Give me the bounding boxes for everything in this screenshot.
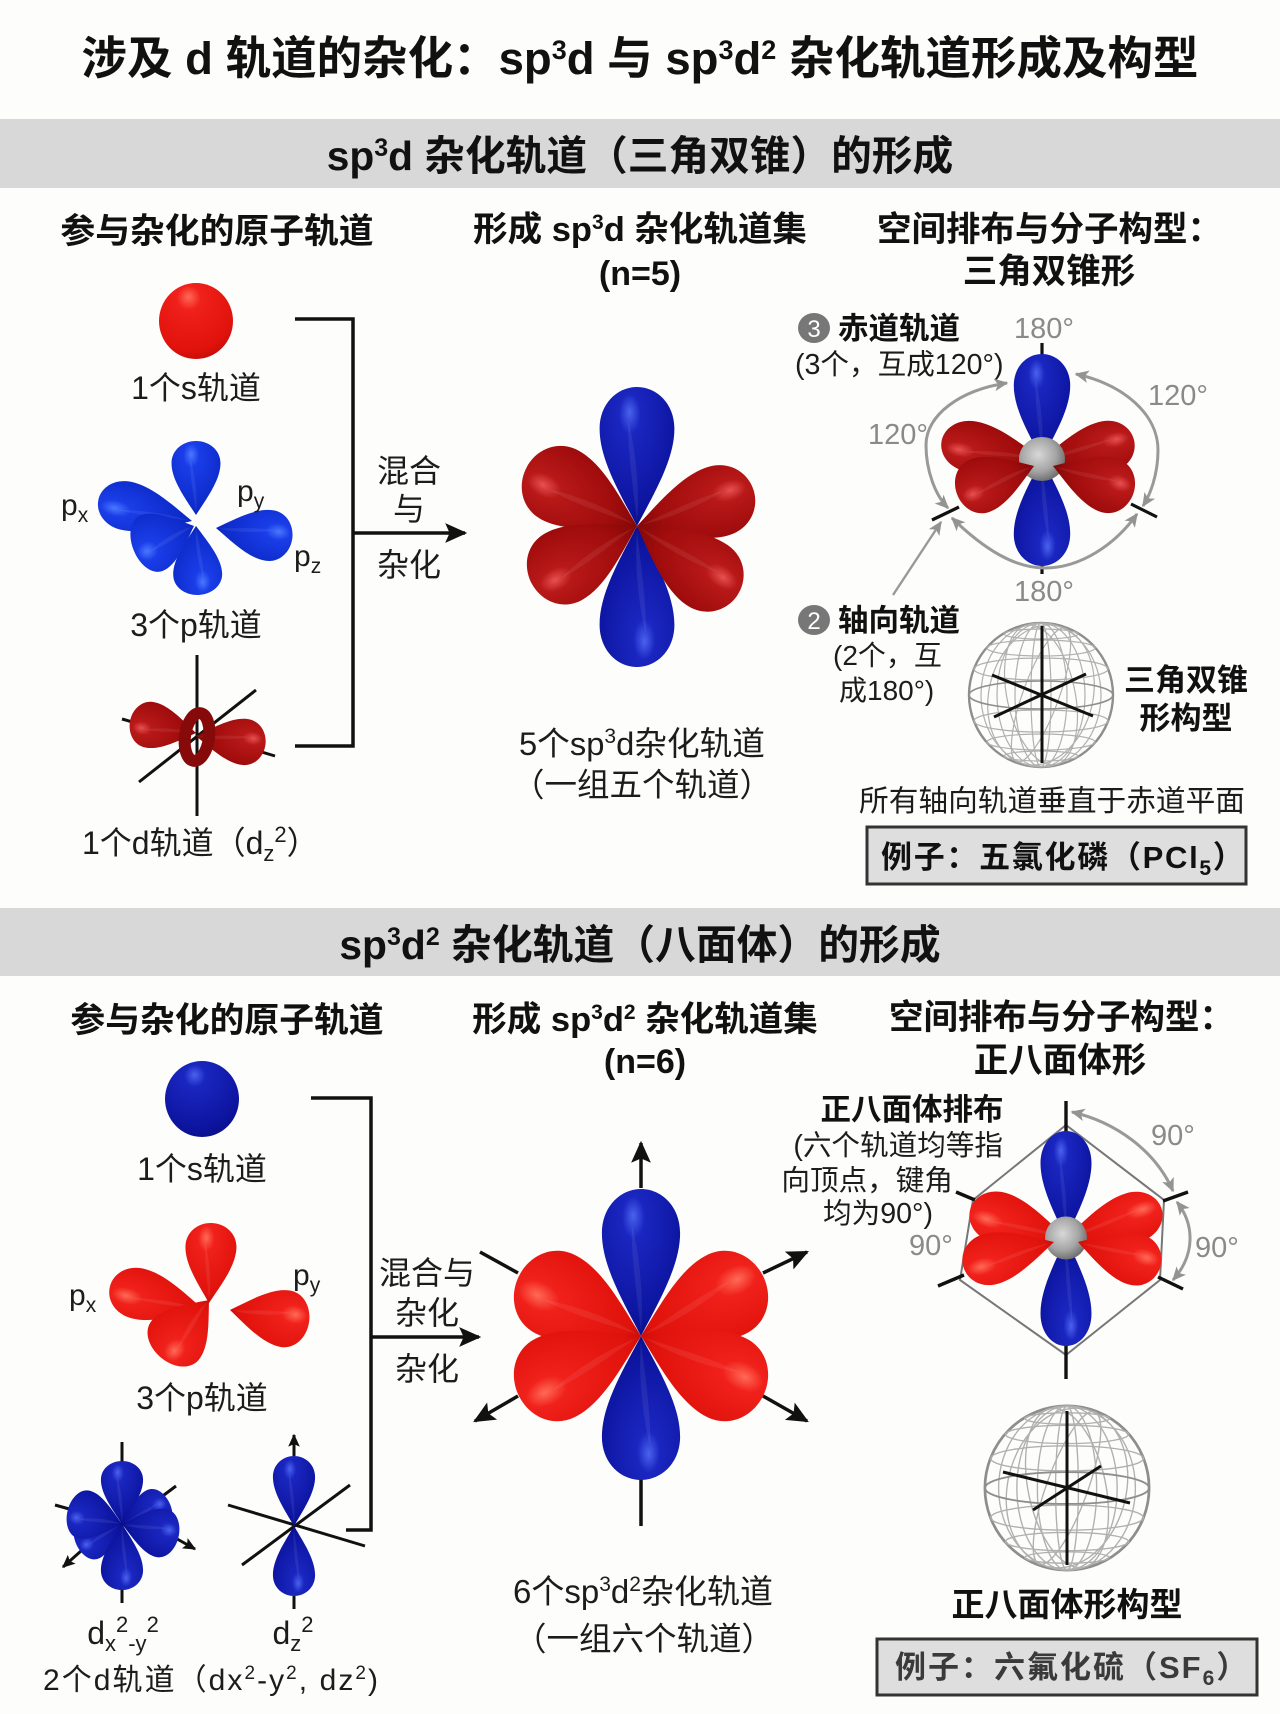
angle: 90° bbox=[1151, 1120, 1195, 1152]
icon: octahedral orbitals bbox=[938, 1101, 1188, 1379]
example box: 例子：六氟化硫（SF bbox=[895, 1650, 1203, 1685]
arrow: mix bracket bbox=[311, 1098, 479, 1530]
icon: dz2 orbital bbox=[228, 1435, 365, 1609]
heading: 形成 sp bbox=[472, 1001, 591, 1039]
label: mix: 混合 bbox=[377, 453, 441, 489]
label: geometry: 正八面体形构型 bbox=[952, 1586, 1182, 1623]
heading: d 杂化轨道集 bbox=[604, 211, 807, 249]
banner heading: 3 bbox=[387, 923, 401, 951]
label: hybridize: 杂化 bbox=[395, 1351, 459, 1387]
angle: 180° bbox=[1014, 576, 1074, 608]
badge 3: 3 bbox=[807, 316, 821, 343]
label: d orbital: z bbox=[263, 841, 274, 866]
panel: sp3d2 hybrid set bbox=[472, 1001, 818, 1657]
banner heading: 杂化轨道（八面体）的形成 bbox=[440, 922, 941, 968]
panel: sp3d hybrid set bbox=[473, 211, 807, 803]
angle: 90° bbox=[909, 1230, 953, 1262]
label: dx2-y2: d bbox=[87, 1615, 105, 1651]
label: axial detail 1: (2个，互 bbox=[833, 640, 942, 671]
arcs bbox=[926, 374, 1158, 568]
label: px: x bbox=[78, 504, 89, 527]
label: d orbital: 1个d轨道（d bbox=[82, 825, 263, 861]
banner heading: sp bbox=[339, 922, 387, 968]
label: py: p bbox=[237, 475, 254, 508]
panel: sp3d2 geometry bbox=[781, 999, 1257, 1695]
heading: 参与杂化的原子轨道 bbox=[70, 1001, 384, 1040]
angle: 90° bbox=[1195, 1232, 1239, 1264]
detail line 3: 均为90°) bbox=[823, 1198, 933, 1230]
banner heading: d 杂化轨道（三角双锥）的形成 bbox=[388, 133, 953, 179]
icon: trigonal bipyramidal orbitals bbox=[932, 343, 1157, 574]
caption sub: （一组六个轨道） bbox=[514, 1621, 774, 1657]
caption: d bbox=[611, 1573, 629, 1610]
label: axial detail 2: 成180°) bbox=[839, 675, 934, 706]
heading: 杂化轨道集 bbox=[636, 1001, 818, 1039]
icon: six lobes bbox=[475, 1143, 807, 1526]
label: geometry 2: 形构型 bbox=[1140, 701, 1232, 736]
icon: p orbitals bbox=[104, 1222, 313, 1377]
label: mix: 混合与 bbox=[379, 1255, 475, 1291]
label: s orbital: 1个s轨道 bbox=[137, 1151, 267, 1187]
label: dx2-y2: -y bbox=[128, 1631, 147, 1656]
heading: 3 bbox=[592, 211, 604, 234]
label: arrangement: 正八面体排布 bbox=[820, 1093, 1004, 1127]
title: 2 bbox=[761, 35, 776, 65]
banner heading: 3 bbox=[374, 134, 388, 162]
example box: ） bbox=[1213, 840, 1245, 875]
section banner: sp3d bbox=[0, 119, 1280, 188]
outline hexagon bbox=[960, 1125, 1164, 1355]
heading: 空间排布与分子构型： bbox=[889, 999, 1234, 1037]
label: geometry: 三角双锥 bbox=[1124, 663, 1248, 698]
icon: s orbital bbox=[165, 1061, 239, 1137]
label: d orbitals: 2 bbox=[355, 1663, 366, 1684]
angle: 120° bbox=[1148, 380, 1208, 412]
title: d bbox=[733, 33, 761, 84]
caption: 6个sp bbox=[513, 1573, 599, 1610]
heading count: (n=5) bbox=[599, 255, 681, 293]
caption: 3 bbox=[599, 1573, 611, 1596]
icon: wire sphere bbox=[985, 1395, 1149, 1581]
example box bbox=[877, 1639, 1257, 1695]
example box: 6 bbox=[1203, 1667, 1216, 1690]
label: s orbital: 1个s轨道 bbox=[131, 370, 261, 406]
label: d orbitals: ) bbox=[368, 1664, 378, 1697]
title: 涉及 d 轨道的杂化：sp bbox=[82, 33, 552, 84]
title: 杂化轨道形成及构型 bbox=[776, 33, 1198, 84]
icon: p orbitals bbox=[93, 441, 296, 596]
label: equatorial: 赤道轨道 bbox=[838, 312, 960, 346]
angle: 180° bbox=[1014, 313, 1074, 345]
heading: 3 bbox=[591, 1001, 603, 1024]
caption: 杂化轨道 bbox=[641, 1573, 773, 1610]
heading: d bbox=[603, 1001, 624, 1039]
example box: ） bbox=[1216, 1650, 1249, 1685]
label: dx2-y2: 2 bbox=[116, 1612, 128, 1637]
icon: wire sphere bbox=[969, 614, 1113, 776]
badge 2: 2 bbox=[807, 608, 821, 635]
heading sub: 正八面体形 bbox=[974, 1042, 1146, 1080]
label: d orbitals: 2 bbox=[244, 1663, 255, 1684]
heading: 形成 sp bbox=[473, 211, 592, 249]
caption: d杂化轨道 bbox=[616, 725, 765, 762]
section banner: sp3d2 bbox=[0, 908, 1280, 976]
badge 2 bbox=[798, 605, 830, 635]
title: d 与 sp bbox=[567, 33, 718, 84]
label: d orbitals: 2个d轨道（dx bbox=[43, 1664, 242, 1697]
label: pz: p bbox=[294, 540, 311, 573]
example box: 5 bbox=[1199, 857, 1213, 880]
title: 3 bbox=[552, 35, 567, 65]
heading: 空间排布与分子构型： bbox=[877, 211, 1222, 249]
icon: dx2-y2 orbital bbox=[55, 1442, 195, 1603]
detail line 1: (六个轨道均等指 bbox=[793, 1130, 1003, 1162]
arcs bbox=[1072, 1112, 1190, 1280]
label: px: p bbox=[69, 1279, 86, 1312]
label: py: y bbox=[254, 490, 265, 513]
caption: 5个sp bbox=[519, 725, 604, 762]
label: and: 与 bbox=[393, 491, 425, 527]
icon: s orbital bbox=[159, 283, 233, 359]
icon: d orbital bbox=[122, 655, 275, 816]
caption sub: （一组五个轨道） bbox=[512, 767, 772, 803]
heading count: (n=6) bbox=[604, 1043, 686, 1081]
label: dz2: d bbox=[272, 1615, 290, 1651]
label: d orbital: 2 bbox=[274, 822, 287, 847]
label: d orbitals: 2 bbox=[286, 1663, 297, 1684]
banner heading: 2 bbox=[426, 923, 440, 951]
label: equatorial detail: (3个，互成120°) bbox=[795, 349, 1003, 381]
note: 所有轴向轨道垂直于赤道平面 bbox=[859, 785, 1245, 818]
label: dz2: z bbox=[290, 1631, 301, 1656]
detail line 2: 向顶点，键角 bbox=[781, 1165, 953, 1197]
panel: sp3d geometry bbox=[795, 211, 1248, 884]
label: py: p bbox=[293, 1259, 310, 1292]
example box: 例子：五氯化磷（PCl bbox=[881, 840, 1199, 875]
label: d orbital: ） bbox=[287, 825, 319, 861]
title: 3 bbox=[718, 35, 733, 65]
angle: 120° bbox=[868, 419, 928, 451]
heading: 2 bbox=[624, 1001, 636, 1024]
heading: 参与杂化的原子轨道 bbox=[60, 212, 374, 251]
panel: sp3d atomic orbitals bbox=[60, 212, 374, 866]
panel: sp3d2 atomic orbitals bbox=[43, 1001, 384, 1697]
label: dx2-y2: x bbox=[105, 1631, 116, 1656]
label: px: p bbox=[61, 489, 78, 522]
label: dz2: 2 bbox=[301, 1612, 314, 1637]
caption: 2 bbox=[629, 1573, 641, 1596]
label: p orbitals: 3个p轨道 bbox=[136, 1380, 268, 1416]
icon: five lobes bbox=[508, 387, 764, 667]
label: hybridize: 杂化 bbox=[395, 1295, 459, 1331]
banner heading: sp bbox=[327, 133, 374, 179]
arrow: mix bracket bbox=[295, 319, 465, 746]
label: dx2-y2: 2 bbox=[147, 1612, 159, 1637]
badge 3 bbox=[798, 313, 830, 343]
example box bbox=[867, 827, 1246, 884]
label: d orbitals: -y bbox=[257, 1664, 284, 1697]
caption: 3 bbox=[604, 725, 616, 748]
label: pz: z bbox=[311, 555, 321, 578]
label: py: y bbox=[310, 1274, 321, 1297]
label: px: x bbox=[86, 1294, 97, 1317]
heading sub: 三角双锥形 bbox=[963, 253, 1135, 291]
label: axial: 轴向轨道 bbox=[838, 604, 960, 638]
arrow: axial pointer bbox=[893, 522, 941, 595]
label: hybridize: 杂化 bbox=[377, 547, 441, 583]
label: d orbitals: , dz bbox=[299, 1664, 353, 1697]
label: p orbitals: 3个p轨道 bbox=[130, 607, 262, 643]
banner heading: d bbox=[401, 922, 426, 968]
